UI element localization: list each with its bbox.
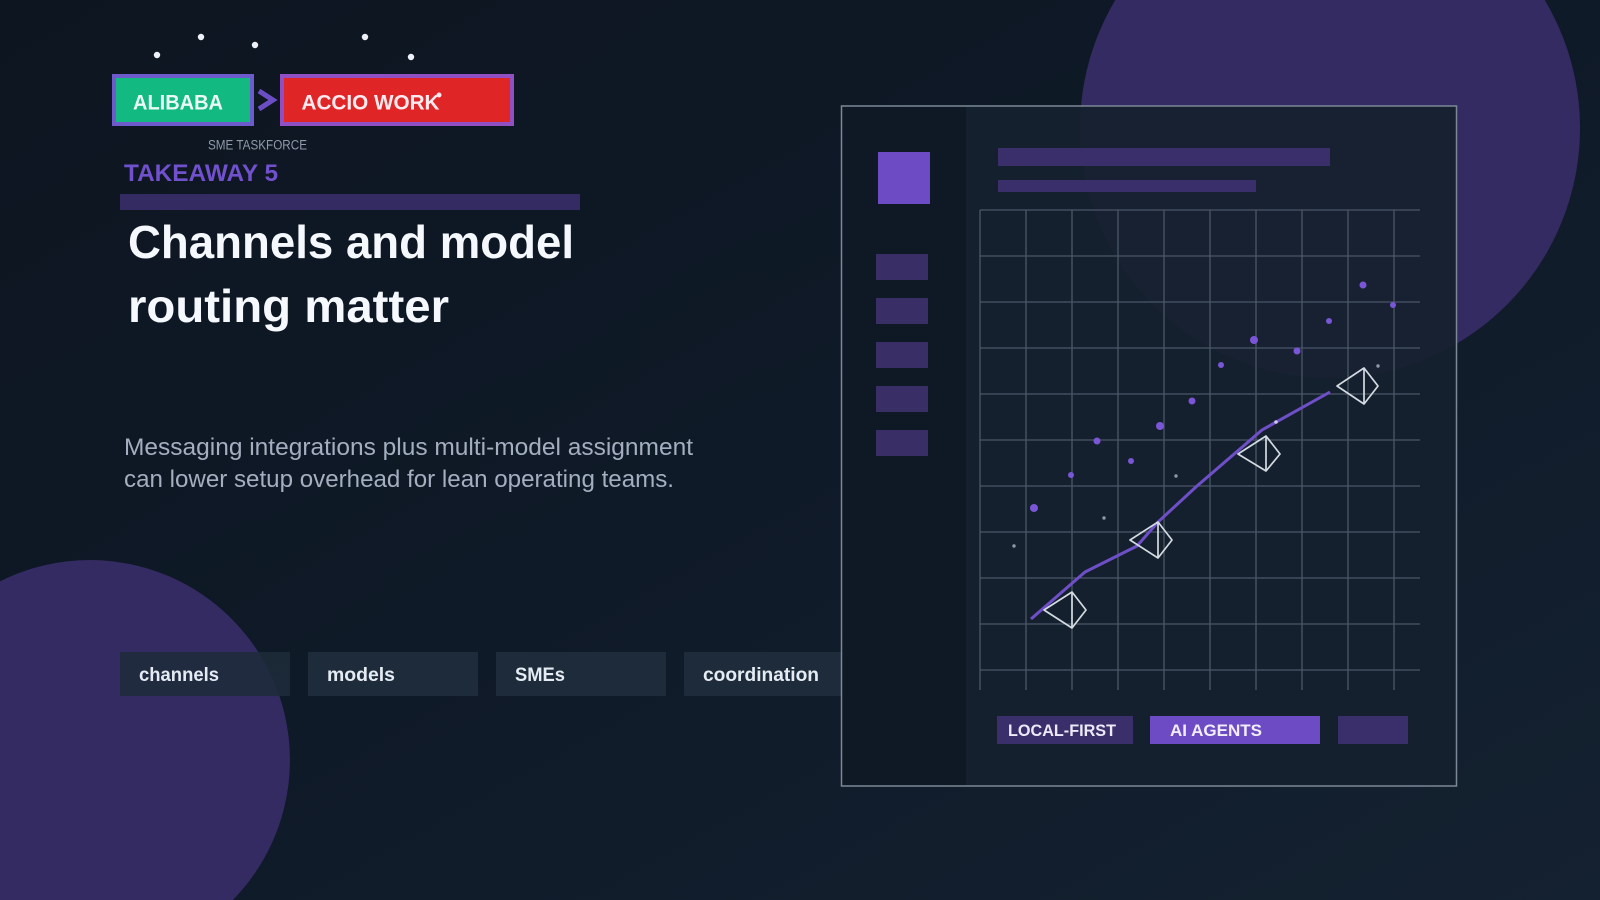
body text: can lower setup overhead for lean operating teams. xyxy=(124,466,674,493)
tag: models xyxy=(308,652,478,696)
tag: SMEs xyxy=(496,652,666,696)
panel sidebar xyxy=(841,106,966,786)
decorative white dots xyxy=(154,34,414,60)
arrow: chevron xyxy=(259,91,273,109)
button: AI agents: AI AGENTS xyxy=(1170,721,1262,740)
tag row xyxy=(120,652,841,696)
title: Channels and model xyxy=(128,216,574,268)
tag: models: models xyxy=(327,665,395,686)
title: routing matter xyxy=(128,280,449,332)
button: empty xyxy=(1338,716,1408,744)
small grey points xyxy=(1012,364,1380,548)
scatter points xyxy=(1030,282,1396,512)
trend line xyxy=(1031,392,1330,619)
badge: Alibaba xyxy=(114,76,252,124)
decorative circle: top right xyxy=(1080,0,1580,378)
badge: Accio Work xyxy=(282,76,512,124)
tag: channels xyxy=(120,652,290,696)
title xyxy=(128,216,574,332)
chart grid xyxy=(980,210,1420,690)
button: local-first xyxy=(997,716,1133,744)
panel background xyxy=(841,106,1457,786)
tag: channels: channels xyxy=(139,665,219,686)
button: AI agents xyxy=(1150,716,1320,744)
panel header placeholder bars xyxy=(998,148,1330,192)
badge: Alibaba: ALIBABA xyxy=(133,92,223,114)
panel: dashboard mockup xyxy=(841,106,1457,786)
button: local-first: LOCAL-FIRST xyxy=(1008,721,1117,740)
accent bar under eyebrow xyxy=(120,194,580,210)
decorative circle: bottom left xyxy=(0,560,290,900)
diamond markers xyxy=(1044,368,1378,628)
badge: Accio Work: ACCIO WORK xyxy=(302,92,440,114)
body text xyxy=(124,434,693,493)
tag: coordination xyxy=(684,652,841,696)
tag: SMEs: SMEs xyxy=(515,665,565,686)
chart: grid with rising line xyxy=(980,210,1420,690)
panel border xyxy=(842,106,1456,786)
body text: Messaging integrations plus multi-model assignment xyxy=(124,434,693,461)
sidebar menu items xyxy=(876,254,928,456)
panel footer buttons xyxy=(997,716,1408,744)
logo: Alibaba to Accio Work xyxy=(114,76,512,124)
caption: SME Taskforce: SME TASKFORCE xyxy=(208,138,307,152)
sidebar logo square xyxy=(878,152,930,204)
eyebrow: Takeaway 5: TAKEAWAY 5 xyxy=(124,160,278,187)
tag: coordination: coordination xyxy=(703,665,819,686)
